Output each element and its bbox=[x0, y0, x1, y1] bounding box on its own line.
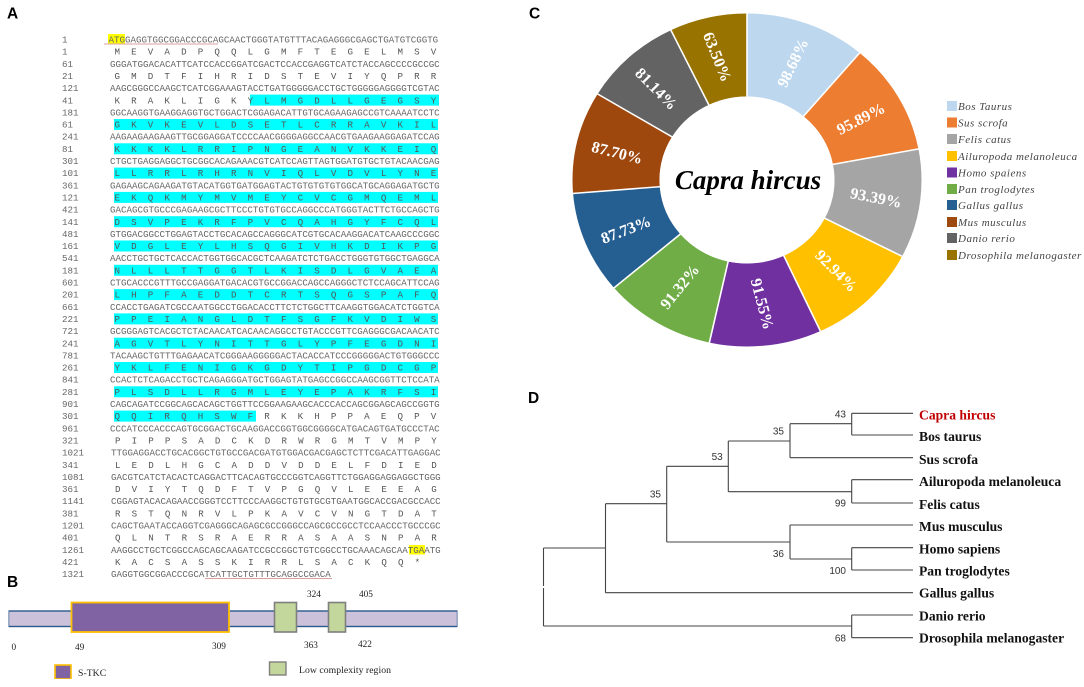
row numbers: 141 bbox=[62, 217, 79, 228]
nucleotide sequence: GACGTCATCTACACTCAGGACTTCACAGTGCCCGGTCAGGTTCTGGAGGAGGAGGCTGGG bbox=[111, 472, 441, 483]
nucleotide sequence: AAGGCCTGCTCGGCCAGCAGCAAGATCCGCCGGCTGTCGGCCTGCAAACAGCAATGAATG bbox=[111, 545, 441, 556]
row numbers: 61 bbox=[62, 59, 73, 70]
panel D: phylogenetic tree bbox=[544, 407, 1064, 646]
percentage labels: 92.94% bbox=[811, 247, 860, 296]
bootstrap values: 99 bbox=[835, 498, 846, 510]
legend: species colours: Mus musculus bbox=[957, 217, 1027, 229]
donut hole bbox=[660, 96, 834, 264]
donut slices bbox=[616, 55, 878, 305]
panel letter D: D bbox=[528, 390, 539, 407]
row numbers: 841 bbox=[62, 375, 79, 386]
legend: species colours: Danio rerio bbox=[957, 233, 1015, 245]
row numbers: 121 bbox=[62, 83, 79, 94]
legend: S-TKC: S-TKC bbox=[78, 668, 106, 679]
row numbers: 401 bbox=[62, 533, 79, 544]
row numbers: 221 bbox=[62, 314, 79, 325]
row numbers: 721 bbox=[62, 326, 79, 337]
amino acid sequence: DSVPEKRFPVCQAHGYFCQL bbox=[114, 217, 447, 228]
amino acid sequence: LLRRLRHRNVIQLVDVLYNE bbox=[114, 168, 447, 179]
row numbers: 41 bbox=[62, 95, 73, 106]
percentage labels: 93.39% bbox=[849, 185, 903, 212]
protein backbone bar bbox=[8, 611, 458, 626]
legend: species colours: Pan troglodytes bbox=[957, 184, 1035, 196]
nucleotide sequence: GAGGTGGCGGACCCGCATCATTGCTGTTTGCAGGCCGACA bbox=[111, 569, 331, 580]
domain position labels: 363 bbox=[304, 641, 318, 651]
nucleotide sequence bbox=[108, 34, 441, 580]
legend: low complexity region bbox=[270, 662, 391, 676]
nucleotide sequence: GCGGGAGTCACGCTCTACAACATCACAACAGGCCTGTACCCGTTCGAGGGCGACAACATC bbox=[110, 326, 440, 337]
amino acid sequence: QQIRQHSWFRKKHPPAEQPV bbox=[114, 411, 447, 422]
panel letter C: C bbox=[529, 6, 540, 22]
bootstrap values: 36 bbox=[773, 549, 784, 560]
nucleotide sequence: CCCATCCCACCCAGTGCGGACTGCAAGGACCGGTGGCGGGGCATGACAGTGATGCCCTAC bbox=[110, 423, 440, 434]
domain position labels bbox=[12, 590, 373, 653]
nucleotide sequence: ATGGAGGTGGCGGACCCGCAGCAACTGGGTATGTTTACAGAGGGCGAGCTGATGTCGGTG bbox=[108, 34, 438, 46]
low complexity region 1 bbox=[274, 602, 296, 632]
row numbers: 961 bbox=[62, 423, 79, 434]
row numbers: 361 bbox=[62, 180, 79, 191]
bootstrap values: 68 bbox=[835, 634, 846, 644]
tree branches bbox=[544, 413, 913, 638]
nucleotide sequence: CGGAGTACACAGAACCGGGTCCTTCCCAAGGCTGTGTGCGTGAATGGCACCGACGCCACC bbox=[111, 496, 441, 507]
amino acid sequence bbox=[114, 47, 448, 568]
domain position labels: 0 bbox=[12, 643, 16, 653]
row numbers: 121 bbox=[62, 192, 79, 203]
nucleotide sequence: CTGCTGAGGAGGCTGCGGCACAGAAACGTCATCCAGTTAGTGGATGTGCTGTACAACGAG bbox=[110, 156, 440, 167]
legend: species colours: Sus scrofa bbox=[958, 118, 1008, 130]
species labels: Felis catus bbox=[919, 497, 980, 512]
nucleotide sequence: GTGGACGGCCTGGAGTACCTGCACAGCCAGGGCATCGTGCACAAGGACATCAAGCCCGGC bbox=[110, 229, 440, 240]
nucleotide sequence: GGCAAGGTGAAGGAGGTGCTGGACTCGGAGACATTGTGCAGAAGAGCCGTCAAAATCCTC bbox=[110, 107, 440, 118]
row numbers: 1 bbox=[62, 47, 68, 58]
row numbers: 421 bbox=[62, 205, 79, 216]
nucleotide sequence: AAGCGGGCCAAGCTCATCGGAAAGTACCTGATGGGGGACCTGCTGGGGGAGGGGTCGTAC bbox=[110, 83, 440, 94]
bootstrap values: 43 bbox=[835, 410, 846, 420]
percentage labels: 63.50% bbox=[699, 30, 734, 84]
row numbers: 301 bbox=[62, 156, 79, 167]
amino acid sequence: AGVTLYNITTGLYPFEGDNI bbox=[114, 338, 447, 349]
amino acid sequence: QLNTRSRAERRASAASNPAR bbox=[115, 533, 448, 544]
legend: species colours: Bos Taurus bbox=[958, 101, 1012, 113]
row numbers: 321 bbox=[62, 435, 79, 446]
row numbers: 1081 bbox=[62, 472, 84, 483]
row numbers: 1021 bbox=[62, 448, 84, 459]
stop codon highlight bbox=[409, 545, 425, 554]
kinase domain cyan highlights bbox=[114, 95, 439, 422]
amino acid sequence: PPEIANGLDTFSGFKVDIWS bbox=[114, 314, 447, 325]
row numbers: 661 bbox=[62, 302, 79, 313]
amino acid sequence: PLSDLLRGMLEYEPAKRFSI bbox=[114, 387, 447, 398]
nucleotide sequence: TTGGAGGACCTGCACGGCTGTGCCGACGATGTGGACGACGAGCTCTTCGACATTGAGGAC bbox=[111, 448, 441, 459]
nucleotide sequence: CAGCAGATCCGGCAGCACAGCTGGTTCCGGAAGAAGCACCCACCAGCGGAGCAGCCGGTG bbox=[110, 399, 440, 410]
legend: species colours bbox=[947, 101, 1082, 262]
percentage labels: 91.32% bbox=[657, 262, 703, 313]
panel letter A: A bbox=[7, 6, 18, 22]
amino acid sequence: YKLFENIGKGDYTIPGDCGP bbox=[114, 363, 447, 374]
row numbers: 161 bbox=[62, 241, 79, 252]
row numbers: 781 bbox=[62, 350, 79, 361]
row numbers: 101 bbox=[62, 168, 79, 179]
row numbers: 601 bbox=[62, 278, 79, 288]
nucleotide sequence: AAGAAGAAGAAGTTGCGGAGGATCCCCAACGGGGAGGCCAACGTGAAGAAGGAGATCCAG bbox=[110, 132, 440, 143]
domain position labels: 422 bbox=[358, 640, 372, 650]
species labels: Mus musculus bbox=[919, 519, 1002, 534]
row numbers: 1261 bbox=[62, 545, 84, 556]
amino acid sequence: RSTQNRVLPKAVCVNGTDAT bbox=[115, 508, 448, 519]
species labels: Homo sapiens bbox=[919, 542, 1000, 557]
species labels: Gallus gallus bbox=[919, 586, 994, 601]
nucleotide sequence: CCACTCTCAGACCTGCTCAGAGGGATGCTGGAGTATGAGCCGGCCAAGCGGTTCTCCATA bbox=[110, 375, 440, 386]
reverse primer underline bbox=[205, 578, 332, 580]
nucleotide sequence: GAGAAGCAGAAGATGTACATGGTGATGGAGTACTGTGTGTGTGGCATGCAGGAGATGCTG bbox=[110, 180, 440, 191]
domain position labels: 324 bbox=[307, 590, 321, 600]
legend: species colours: Homo spaiens bbox=[957, 168, 1027, 180]
percentage labels: 98.68% bbox=[774, 36, 812, 90]
row numbers bbox=[62, 34, 84, 580]
slice separators bbox=[568, 8, 924, 348]
row numbers: 341 bbox=[62, 460, 79, 471]
amino acid sequence: PIPPSADCKDRWRGMTVMPY bbox=[115, 435, 448, 446]
nucleotide sequence: CCACCTGAGATCGCCAATGGCCTGGACACCTTCTCTGGCTTCAAGGTGGACATCTGGTCA bbox=[110, 302, 440, 313]
row numbers: 241 bbox=[62, 338, 79, 349]
species labels: Pan troglodytes bbox=[919, 564, 1010, 579]
amino acid sequence: NLLLTTGGTLKISDLGVAEA bbox=[114, 265, 447, 276]
domain position labels: 309 bbox=[212, 642, 226, 652]
amino acid sequence: VDGLEYLHSQGIVHKDIKPG bbox=[114, 241, 447, 252]
panel B: protein domain diagram bbox=[8, 590, 458, 679]
amino acid sequence: EKQKMYMVMEYCVCGMQEML bbox=[114, 192, 447, 203]
nucleotide sequence: CAGCTGAATACCAGGTCGAGGGCAGAGCGCCGGGCCAGCGCCGCCTCCAACCCTGCCCGC bbox=[111, 520, 441, 532]
percentage labels bbox=[590, 30, 903, 331]
panel A: nucleotide and amino acid sequence bbox=[62, 34, 448, 580]
nucleotide sequence: CTGCACCCGTTTGCCGAGGATGACACGTGCCGGACCAGCCAGGGCTCTCCAGCATTCCAG bbox=[110, 278, 440, 288]
amino acid sequence: KACSASSKIRRLSACKQQ* bbox=[115, 557, 431, 568]
legend: species colours: Gallus gallus bbox=[958, 200, 1023, 212]
row numbers: 181 bbox=[62, 107, 79, 118]
amino acid sequence: LHPFAEDDTCRTSQGSPAFQ bbox=[114, 290, 447, 301]
S-TKC domain bbox=[72, 602, 229, 632]
row numbers: 201 bbox=[62, 290, 79, 301]
nucleotide sequence: GGGATGGACACATTCATCCACCGGATCGACTCCACCGAGGTCATCTACCAGCCCCGCCGC bbox=[110, 59, 440, 70]
row numbers: 481 bbox=[62, 229, 79, 240]
nucleotide sequence: GACAGCGTGCCCGAGAAGCGCTTCCCTGTGTGCCAGGCCCATGGGTACTTCTGCCAGCTG bbox=[110, 205, 440, 216]
bootstrap values: 35 bbox=[773, 426, 784, 438]
legend: S-TKC bbox=[55, 665, 106, 679]
row numbers: 901 bbox=[62, 399, 79, 410]
row numbers: 181 bbox=[62, 265, 79, 276]
nucleotide sequence: TACAAGCTGTTTGAGAACATCGGGAAGGGGGACTACACCATCCCGGGGGACTGTGGGCCC bbox=[110, 350, 440, 361]
amino acid sequence: MEVADPQQLGMFTEGELMSV bbox=[114, 47, 447, 58]
nucleotide sequence: AACCTGCTGCTCACCACTGGTGGCACGCTCAAGATCTCTGACCTGGGTGTGGCTGAGGCA bbox=[110, 253, 440, 264]
legend: species colours: Felis catus bbox=[957, 134, 1011, 146]
amino acid sequence: GKVKEVLDSETLCRRAVKIL bbox=[114, 120, 447, 131]
species labels: Danio rerio bbox=[919, 609, 986, 624]
row numbers: 261 bbox=[62, 363, 79, 374]
species labels: Sus scrofa bbox=[919, 452, 978, 467]
row numbers: 281 bbox=[62, 387, 79, 398]
amino acid sequence: GMDTFIHRIDSTEVIYQPRR bbox=[114, 71, 447, 82]
panel letter B: B bbox=[7, 574, 18, 591]
species labels: Ailuropoda melanoleuca bbox=[919, 474, 1061, 489]
row numbers: 241 bbox=[62, 132, 79, 143]
row numbers: 301 bbox=[62, 411, 79, 422]
forward primer underline bbox=[104, 43, 218, 45]
legend: low complexity region: Low complexity region bbox=[299, 665, 391, 676]
amino acid sequence: DVIYTQDFTVPGQVLEEEAG bbox=[115, 484, 448, 495]
panel C: donut chart of sequence identity bbox=[568, 8, 924, 348]
percentage labels: 95.89% bbox=[834, 100, 888, 139]
row numbers: 1 bbox=[62, 34, 68, 46]
bootstrap values: 100 bbox=[829, 566, 846, 577]
amino acid sequence: KKKKLRRIPNGEANVKKEIQ bbox=[114, 144, 447, 155]
row numbers: 81 bbox=[62, 144, 73, 155]
amino acid sequence: LEDLHGCADDVDDELFDIED bbox=[115, 460, 448, 471]
domain position labels: 405 bbox=[359, 590, 373, 600]
percentage labels: 87.70% bbox=[590, 139, 644, 168]
domain position labels: 49 bbox=[75, 643, 85, 653]
donut centre title: Capra hircus bbox=[675, 165, 821, 195]
species labels: Drosophila melanogaster bbox=[919, 631, 1064, 646]
amino acid sequence: KRAKLIGKYLMGDLLGEGSY bbox=[114, 95, 447, 106]
bootstrap values: 35 bbox=[650, 490, 661, 500]
legend: species colours: Drosophila melanogaster bbox=[957, 250, 1082, 262]
bootstrap values bbox=[650, 410, 846, 644]
row numbers: 1141 bbox=[62, 496, 84, 507]
species labels: Capra hircus bbox=[919, 407, 995, 422]
start codon highlight bbox=[108, 34, 125, 44]
row numbers: 1321 bbox=[62, 569, 84, 580]
row numbers: 421 bbox=[62, 557, 79, 568]
row numbers: 381 bbox=[62, 508, 79, 519]
row numbers: 21 bbox=[62, 71, 73, 82]
species labels bbox=[919, 407, 1064, 646]
species labels: Bos taurus bbox=[919, 429, 981, 444]
row numbers: 541 bbox=[62, 253, 79, 264]
percentage labels: 91.55% bbox=[747, 277, 776, 331]
row numbers: 61 bbox=[62, 120, 73, 131]
low complexity region 2 bbox=[328, 602, 346, 632]
bootstrap values: 53 bbox=[712, 452, 723, 463]
row numbers: 1201 bbox=[62, 520, 84, 532]
percentage labels: 87.73% bbox=[599, 213, 653, 248]
row numbers: 361 bbox=[62, 484, 79, 495]
percentage labels: 81.14% bbox=[631, 65, 680, 114]
legend: species colours: Ailuropoda melanoleuca bbox=[957, 151, 1078, 163]
